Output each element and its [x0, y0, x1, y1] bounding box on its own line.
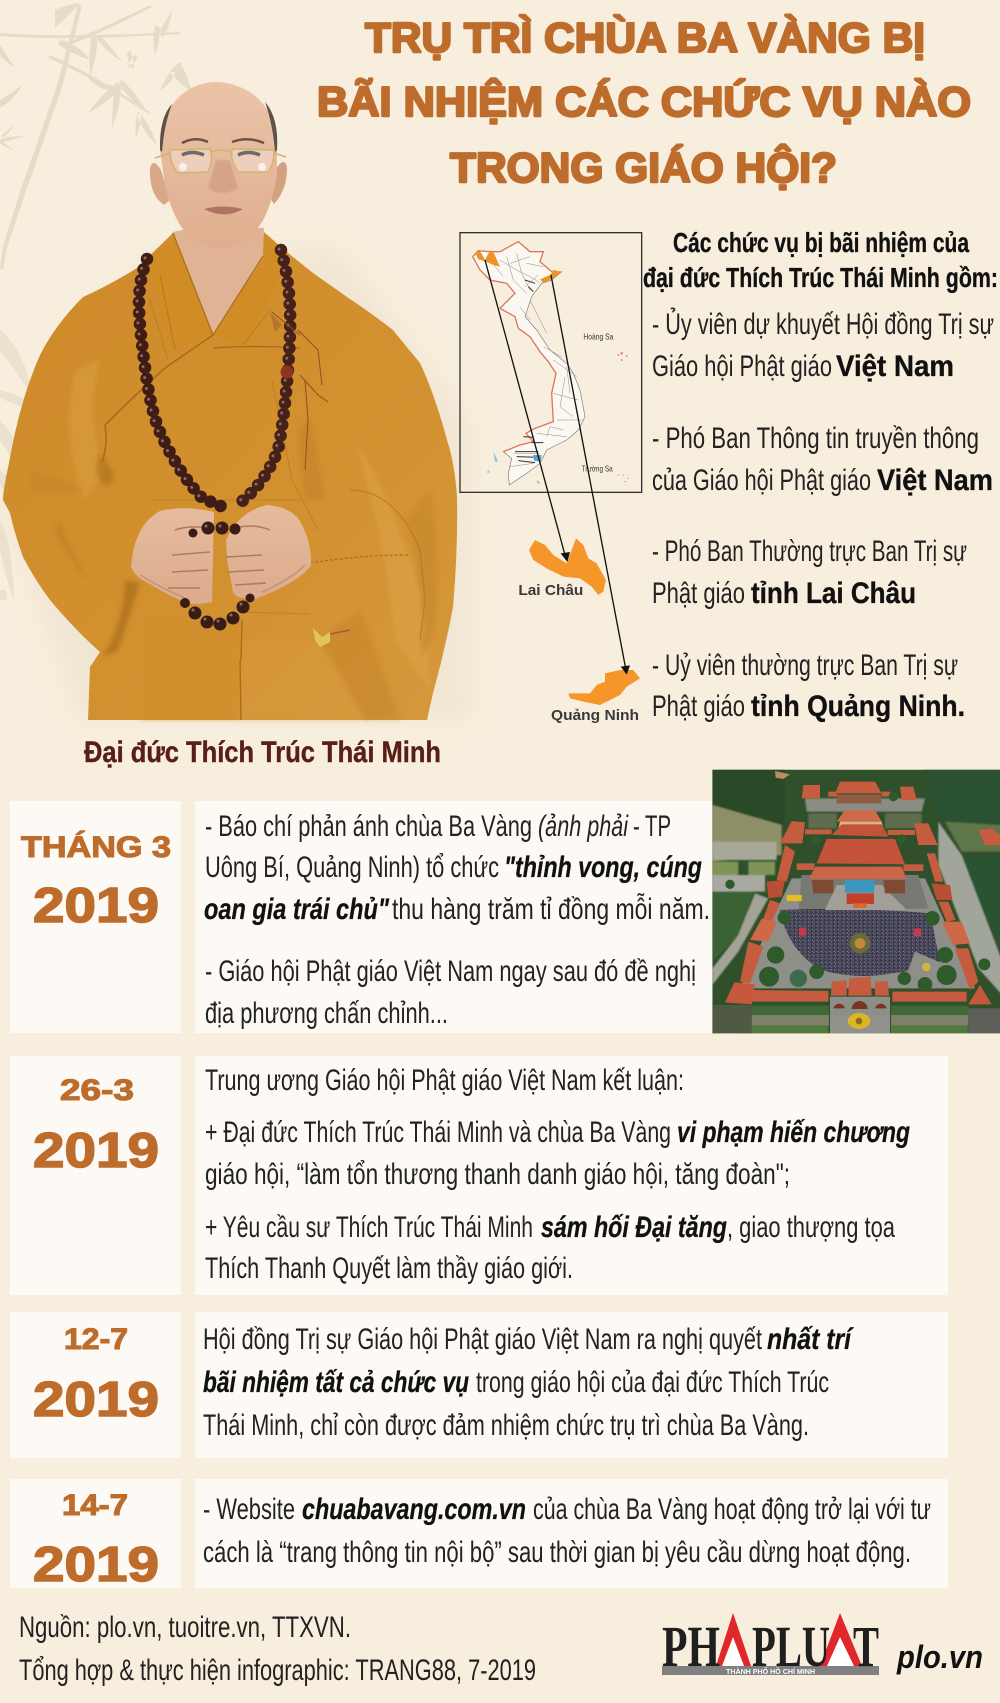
- timeline row: 26-3 2019: vi phạm hiến chương: [677, 1116, 910, 1149]
- timeline row: 12-7 2019: nhất trí: [767, 1323, 854, 1356]
- map of Vietnam with frame: [460, 233, 642, 724]
- timeline row: 26-3 2019: giáo hội, “làm tổn thương thanh danh giáo hội, tăng đoàn";: [205, 1158, 790, 1191]
- timeline row: March 2019: - Báo chí phản ánh chùa Ba Vàng: [205, 810, 532, 843]
- timeline row: March 2019: [10, 801, 715, 1033]
- timeline row: 26-3 2019: Thích Thanh Quyết làm thầy giáo giới.: [205, 1252, 573, 1285]
- timeline row: 26-3 2019: [10, 1056, 948, 1295]
- timeline row: 14-7 2019: - Website: [203, 1493, 295, 1526]
- list of dismissed positions: Việt Nam: [836, 350, 954, 383]
- center garden: [850, 933, 870, 954]
- crowd: [780, 909, 940, 976]
- gold tag: [313, 628, 330, 647]
- map outline: [473, 242, 585, 485]
- map of Vietnam with frame: Trường Sa: [582, 464, 613, 474]
- photo: monk portrait: [0, 82, 470, 720]
- timeline row: March 2019: THÁNG 3: [21, 830, 171, 864]
- title: TRỤ TRÌ CHÙA BA VÀNG BỊ: [365, 13, 925, 61]
- trees: [725, 792, 990, 992]
- title: [317, 13, 971, 191]
- timeline row: 12-7 2019: bãi nhiệm tất cả chức vụ: [203, 1366, 469, 1399]
- bamboo background decoration: [0, 3, 192, 600]
- timeline row: 26-3 2019: + Yêu cầu sư Thích Trúc Thái Minh: [205, 1211, 533, 1244]
- highlighted provinces on map: [475, 251, 562, 283]
- logo: Pháp Luật: PH: [662, 1614, 720, 1679]
- logo: Pháp Luật: T: [853, 1614, 879, 1679]
- source credits: Nguồn: plo.vn, tuoitre.vn, TTXVN.: [19, 1611, 351, 1644]
- list of dismissed positions: Phật giáo: [652, 690, 745, 723]
- timeline row: March 2019: thu hàng trăm tỉ đồng mỗi năm.: [392, 893, 710, 926]
- stairs and altar: [825, 885, 907, 910]
- province: Lai Châu: [529, 538, 606, 595]
- timeline row: 14-7 2019: 2019: [33, 1538, 159, 1592]
- timeline row: March 2019: - TP: [633, 810, 671, 843]
- held beads: [180, 522, 254, 630]
- province: Quảng Ninh: [568, 670, 640, 705]
- list of dismissed positions: tỉnh Lai Châu: [751, 577, 916, 610]
- roofs: [725, 771, 1000, 1004]
- timeline row: 26-3 2019: + Đại đức Thích Trúc Thái Minh và chùa Ba Vàng: [205, 1116, 671, 1149]
- map of Vietnam with frame: Quảng Ninh: [551, 707, 639, 724]
- logo: Pháp Luật: PLU: [752, 1614, 830, 1679]
- courtyard: [740, 878, 975, 988]
- timeline row: 12-7 2019: [10, 1312, 948, 1458]
- red bead and threads: [280, 366, 294, 378]
- timeline row: 26-3 2019: Trung ương Giáo hội Phật giáo Việt Nam kết luận:: [205, 1064, 684, 1097]
- timeline row: March 2019: "thỉnh vong, cúng: [504, 851, 702, 884]
- list of dismissed positions: [643, 227, 998, 723]
- site name: plo.vn: [896, 1639, 983, 1675]
- monk head: [150, 82, 287, 249]
- timeline row: March 2019: địa phương chấn chỉnh...: [205, 997, 448, 1030]
- title: BÃI NHIỆM CÁC CHỨC VỤ NÀO: [317, 77, 971, 125]
- timeline row: 12-7 2019: trong giáo hội của đại đức Thích Trúc: [476, 1366, 829, 1399]
- timeline row: March 2019: 2019: [33, 879, 159, 933]
- timeline row: 26-3 2019: 2019: [33, 1124, 159, 1178]
- timeline row: 26-3 2019: , giao thượng tọa: [727, 1211, 895, 1244]
- source credits: [19, 1611, 536, 1687]
- title: TRONG GIÁO HỘI?: [450, 143, 837, 191]
- timeline row: 14-7 2019: 14-7: [62, 1489, 128, 1522]
- gate and bottom: [830, 997, 890, 1015]
- timeline row: 12-7 2019: Hội đồng Trị sự Giáo hội Phật giáo Việt Nam ra nghị quyết: [203, 1323, 762, 1356]
- prayer bead strands: [137, 249, 290, 507]
- list of dismissed positions: của Giáo hội Phật giáo: [652, 464, 871, 497]
- timeline row: 12-7 2019: 12-7: [64, 1323, 128, 1356]
- timeline row: March 2019: Uông Bí, Quảng Ninh) tổ chức: [205, 851, 499, 884]
- name caption: Đại đức Thích Trúc Thái Minh: [84, 736, 441, 769]
- timeline row: 14-7 2019: chuabavang.com.vn: [302, 1493, 526, 1526]
- arrows: [485, 260, 625, 667]
- source credits: Tổng hợp & thực hiện infographic: TRANG88, 7-2019: [19, 1654, 536, 1687]
- glasses: [155, 149, 286, 173]
- right hand: [226, 505, 311, 599]
- monk robe: [3, 233, 457, 720]
- aerial photo of Ba Vàng pagoda: [712, 770, 1000, 1033]
- timeline row: 14-7 2019: [10, 1479, 948, 1592]
- list of dismissed positions: Phật giáo: [652, 577, 745, 610]
- list of dismissed positions: tỉnh Quảng Ninh.: [751, 690, 965, 723]
- map of Vietnam with frame: Hoàng Sa: [583, 331, 613, 341]
- timeline row: March 2019: oan gia trái chủ": [204, 893, 390, 926]
- logo: Pháp Luật: [662, 1613, 879, 1679]
- map of Vietnam with frame: Lai Châu: [518, 582, 583, 599]
- list of dismissed positions: Giáo hội Phật giáo: [652, 350, 832, 383]
- timeline row: 12-7 2019: 2019: [33, 1373, 159, 1427]
- timeline row: 26-3 2019: 26-3: [60, 1074, 134, 1107]
- left hand: [131, 508, 214, 604]
- timeline row: March 2019: - Giáo hội Phật giáo Việt Nam ngay sau đó đề nghị: [205, 955, 696, 988]
- timeline row: March 2019: (ảnh phải: [538, 810, 629, 843]
- neck and collar: [173, 225, 264, 335]
- perimeter wall roofs: [777, 845, 795, 882]
- timeline row: 26-3 2019: sám hối Đại tăng: [541, 1211, 727, 1244]
- logo: Pháp Luật: THÀNH PHỐ HỒ CHÍ MINH: [726, 1666, 815, 1676]
